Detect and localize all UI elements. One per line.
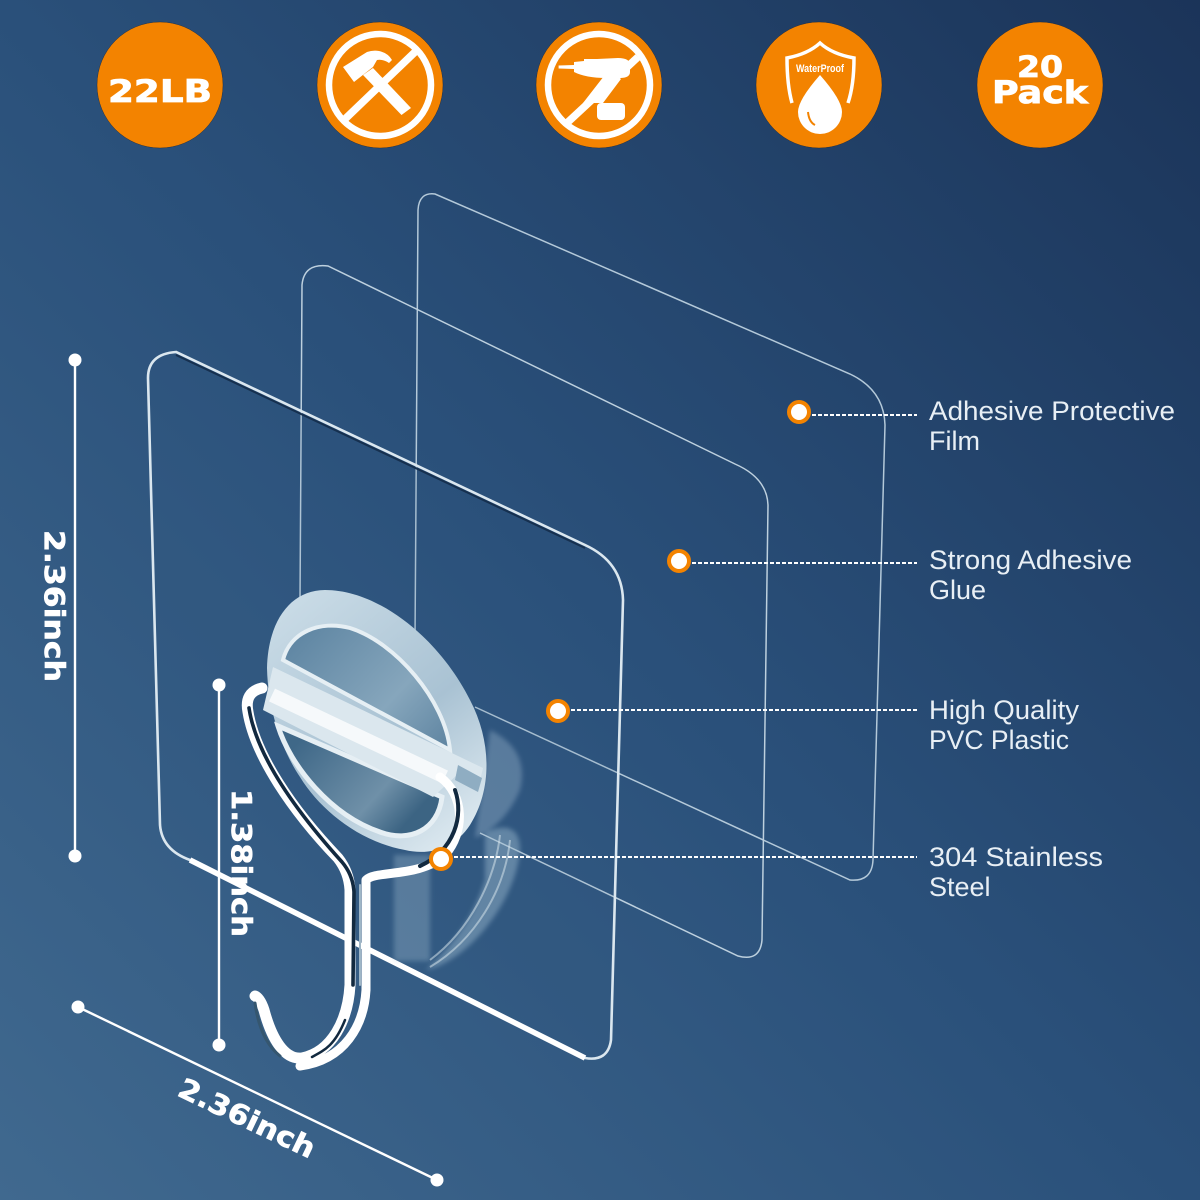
callout: 304 stainless steel: Steel [929, 872, 991, 902]
callout: adhesive protective film: Film [929, 426, 980, 456]
callout: strong adhesive glue: Strong Adhesive [929, 545, 1132, 575]
badge: no hammer [317, 22, 443, 148]
callout: adhesive protective film [789, 396, 1175, 456]
badge: 22LB [97, 22, 223, 148]
badge: waterproof [756, 22, 882, 148]
callout: high quality PVC plastic: PVC Plastic [929, 725, 1069, 755]
callout: strong adhesive glue [669, 545, 1132, 605]
sheet top edge shadow [176, 355, 585, 548]
dimension: sheet height 2.36inch: 2.36inch [38, 530, 71, 682]
badge: waterproof: WaterProof [796, 63, 844, 75]
callout: strong adhesive glue: Glue [929, 575, 986, 605]
callout: adhesive protective film: Adhesive Protective [929, 396, 1175, 426]
layer: strong adhesive glue sheet [300, 266, 768, 957]
badge: 22LB: 22LB [108, 74, 212, 110]
callout: high quality PVC plastic: High Quality [929, 695, 1079, 725]
badge: 20 Pack: Pack [992, 75, 1090, 111]
layer: adhesive protective film sheet [415, 194, 885, 880]
callout: 304 stainless steel: 304 Stainless [929, 842, 1103, 872]
dimension: sheet width 2.36inch [72, 1000, 444, 1186]
sheet bottom edge highlight [190, 860, 585, 1058]
dimension: hook height 1.38inch [212, 678, 258, 1052]
badge: no drill [536, 22, 662, 148]
metal hook [247, 688, 459, 1066]
suction cup back ghost [394, 730, 522, 970]
layer: PVC plastic sheet [148, 352, 623, 1059]
badge: 20 Pack: 20 [1017, 50, 1063, 84]
callout: 304 stainless steel [431, 842, 1103, 902]
callout: high quality PVC plastic [548, 695, 1079, 755]
badge: 20 Pack [977, 22, 1103, 148]
dimension: hook height 1.38inch: 1.38inch [225, 789, 258, 937]
dimension: sheet height 2.36inch [38, 354, 82, 862]
suction cup [263, 590, 486, 852]
dimension: sheet width 2.36inch: 2.36inch [173, 1072, 321, 1165]
